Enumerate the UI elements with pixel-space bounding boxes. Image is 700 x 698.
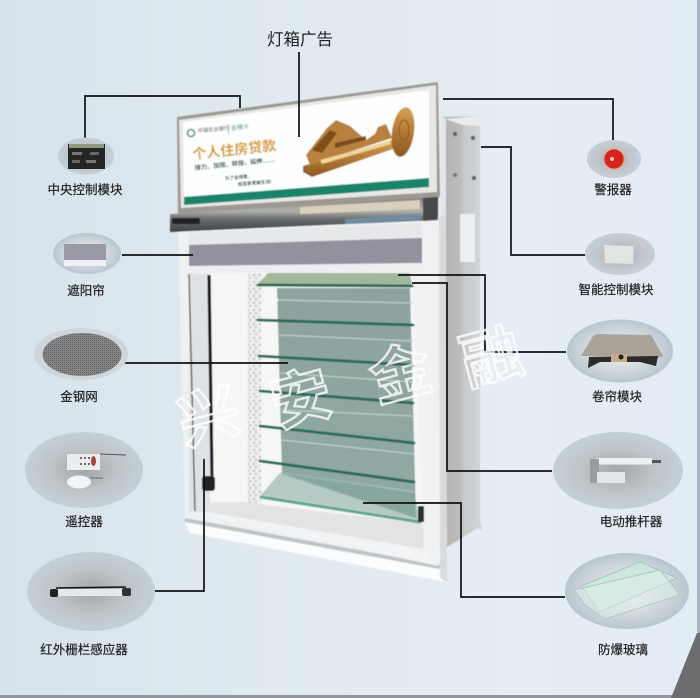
watermark: 融: [454, 317, 529, 398]
title: light box advertising: 灯箱广告: [267, 30, 333, 49]
side housing: [442, 116, 482, 548]
component: steel mesh: [34, 328, 128, 404]
watermark: 安: [264, 359, 339, 439]
bank logo: 中国农业银行: [198, 124, 229, 134]
component: explosion-proof glass: [565, 553, 689, 657]
component: remote control: 遥控器: [65, 515, 103, 529]
component: roller shutter module: [567, 320, 673, 404]
sign sub text: 接力、加按、转按、延伸……: [194, 156, 275, 172]
component: alarm: [587, 140, 641, 197]
sign small text: 祝您享受美生活!: [238, 178, 272, 188]
component: explosion-proof glass: 防爆玻璃: [598, 642, 648, 657]
bank logo: [187, 122, 249, 137]
component: steel mesh: 金钢网: [60, 389, 98, 404]
right frame column: [413, 268, 440, 566]
sill: [207, 502, 423, 549]
sign small text: 为了全球者,: [225, 173, 249, 182]
key image: [303, 106, 417, 177]
watermark: 兴: [171, 377, 246, 458]
component: alarm: 警报器: [594, 182, 632, 197]
sign headline: 个人住房贷款: [192, 137, 277, 162]
component: roller shutter module: 卷帘模块: [592, 389, 642, 404]
sign small text: [225, 173, 272, 188]
green strip: [184, 178, 429, 205]
component: central control module: [47, 138, 123, 197]
roller shutter blind: [189, 223, 422, 274]
opening interior: [207, 272, 423, 522]
glass back: [277, 288, 416, 518]
sign panel: [183, 90, 429, 205]
leader lines: [85, 52, 613, 597]
perforated left column: [248, 273, 261, 505]
explosion-proof glass louvres: [257, 273, 420, 522]
white frame: [178, 216, 447, 582]
metal crossbar: [170, 197, 438, 232]
component: electric actuator: [553, 432, 683, 529]
component: smart control module: 智能控制模块: [578, 282, 654, 297]
lightbox sign: [177, 82, 440, 216]
bank logo: 金穗卡: [230, 122, 249, 132]
component: sun blind: [53, 233, 121, 298]
inner left frame channel: [189, 274, 215, 512]
watermark: [171, 317, 529, 458]
component: electric actuator: 电动推杆器: [600, 515, 663, 529]
window unit illustration: [170, 82, 482, 582]
component: remote control: [25, 432, 143, 529]
component: sun blind: 遮阳帘: [67, 283, 105, 298]
watermark: 金: [363, 334, 438, 415]
component: smart control module: [578, 233, 655, 297]
component: infrared sensor: 红外栅栏感应器: [40, 642, 128, 657]
component: infrared sensor: [27, 552, 155, 657]
component: central control module: 中央控制模块: [47, 182, 123, 197]
